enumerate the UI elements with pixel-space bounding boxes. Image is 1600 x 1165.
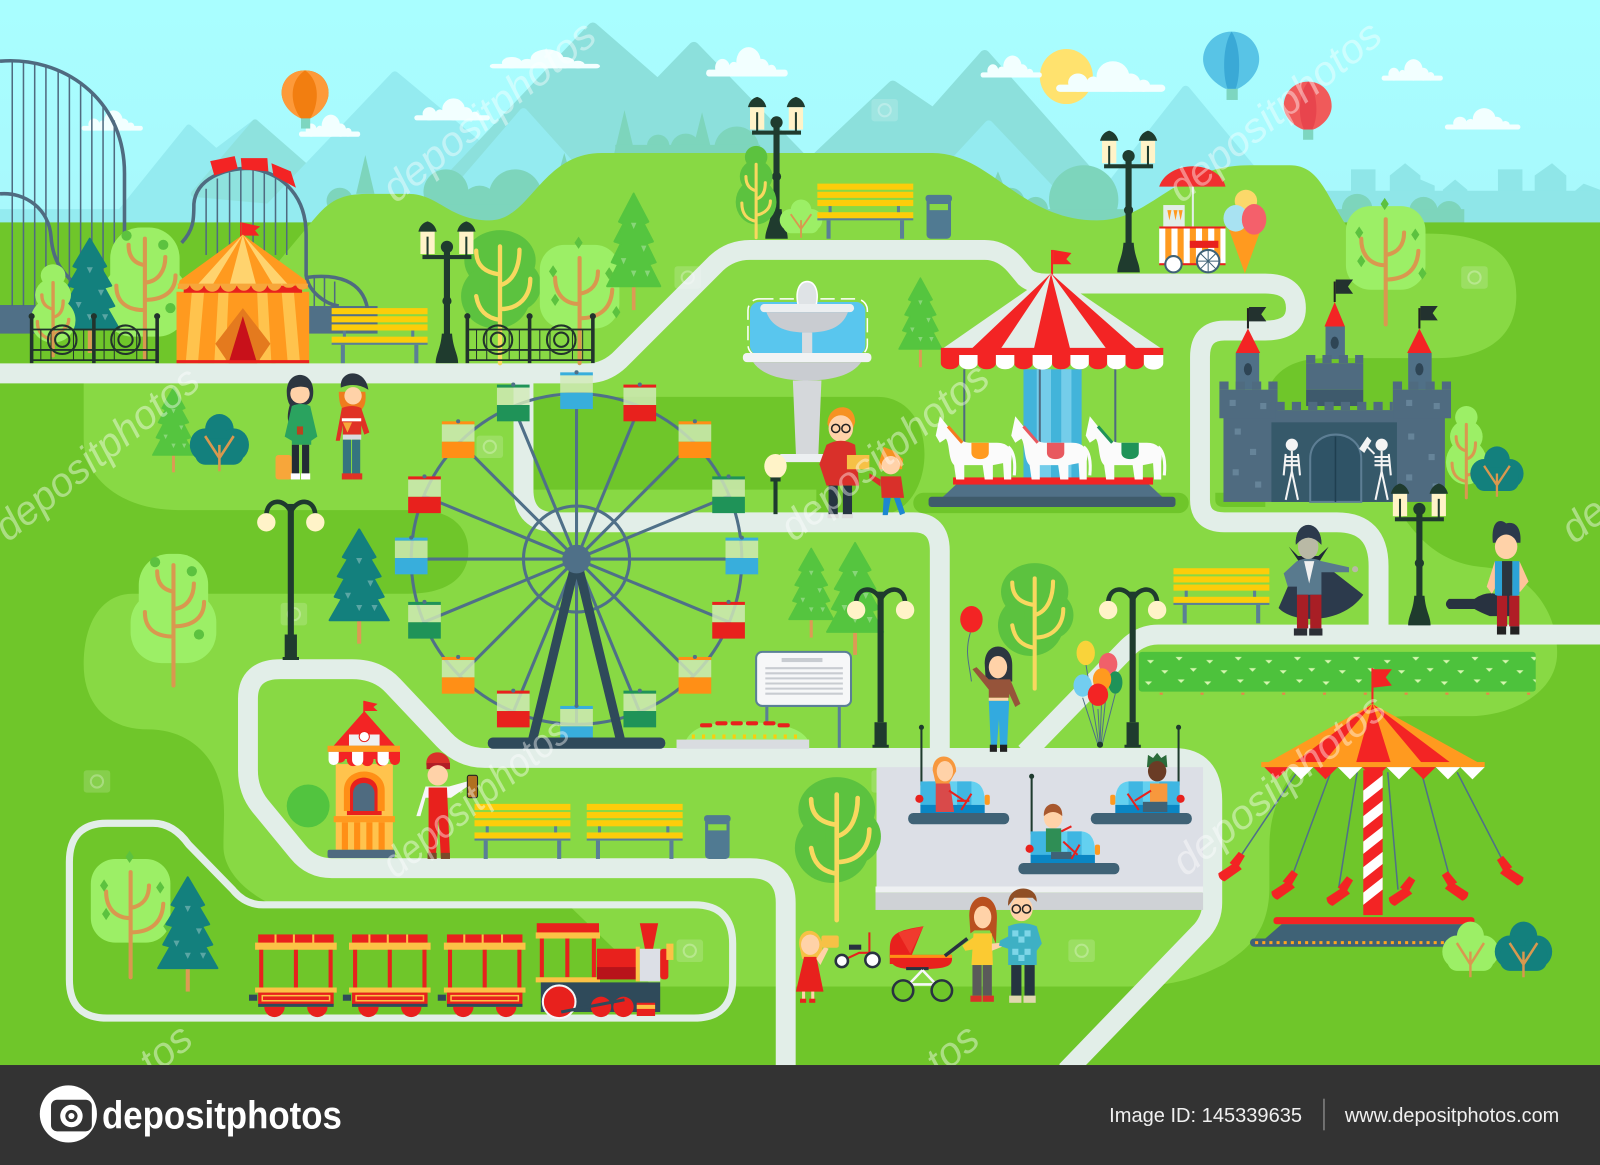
watermarks: depositphotos [771,353,998,550]
tree: light by lamp [540,237,620,363]
bench: lower right [587,804,683,859]
hedge [1139,652,1536,695]
father with glasses [999,889,1042,1003]
ferris wheel [395,370,758,749]
hot air balloon: red [1284,82,1332,140]
dark ground [0,222,1600,1069]
tree: train loop [91,851,171,977]
lamp post: centre [847,590,914,748]
tree: dark green by lamp [461,230,541,363]
castle [1219,280,1451,502]
road: main lower loop [248,669,1212,1071]
tree: right hill [1346,198,1427,324]
light ground area [84,153,1557,986]
flower bed [677,722,809,749]
hot air balloon: orange [282,70,329,129]
balloon bunch [1073,641,1122,748]
watermarks: depositphotos [373,11,605,211]
tree: by castle [1446,406,1487,498]
conifer: teal left field [330,529,389,644]
fence: left [29,313,160,363]
cabins [395,370,758,743]
musician with guitar case [1446,521,1529,635]
swing carousel [1218,668,1523,947]
wheel frame [411,394,742,724]
watermarks: depositphotos [1162,684,1394,884]
train carriage 3 [438,934,526,1017]
lamp post: tent [418,221,476,363]
roller coaster [0,61,378,334]
conifer: teal near coaster [60,239,119,353]
image id: Image ID: 145339635 [1109,1105,1302,1127]
bush: top hill [780,199,822,238]
small lamp [764,454,787,514]
bumper car arena floor [876,767,1203,910]
watermarks: tos [917,1014,988,1084]
tree: narrow lime [31,264,76,356]
stroller [890,926,967,1001]
clouds [82,47,1520,137]
logo icon [40,1085,97,1143]
website: www.depositphotos.com [1344,1105,1559,1127]
fountain [743,282,871,462]
skeleton: right [1359,437,1391,500]
bush: by visitors [190,414,249,471]
conifers: centre pair [789,543,883,655]
bumper car: centre [1018,774,1119,874]
lamp post: balloons [1099,590,1166,748]
information board [756,652,851,748]
road: centre path [523,383,940,760]
dark patches on light ground [534,397,1265,515]
lamp post: castle [1391,484,1448,625]
bush: by castle [1470,446,1524,497]
road network [0,250,1600,1071]
giant ice cream [1223,190,1266,273]
visitor: girl in green [276,375,317,479]
sky [0,0,1600,224]
bench: mid-right [1173,568,1269,623]
vampire [1279,525,1363,636]
conifer: beside carousel [899,278,942,367]
conifer: by visitors [153,388,194,472]
train [249,923,673,1018]
bench: lower left [474,804,570,859]
carousel [929,250,1176,507]
skeleton: left [1284,439,1300,500]
tree: by arena [795,777,881,920]
road: right branch [1026,635,1600,753]
watermarks: depositphotos [1158,11,1390,211]
bench: by tent [332,308,428,363]
fence: right [464,313,596,363]
trash bin: lower [704,815,731,859]
sun [1040,49,1093,104]
road: upper park path [0,250,1379,635]
lamp post: left field [257,502,324,660]
locomotive [536,923,673,1018]
visitor: child with father [869,447,905,515]
bush: light by swing [1442,922,1499,977]
roller coaster cars [210,156,296,188]
watermarks: tos [130,1014,201,1084]
conifer: train loop [158,877,217,992]
distant city skyline [1311,163,1600,222]
hot air balloon: blue [1203,32,1259,100]
visitor: father with map [819,407,869,518]
visitor: girl in red [336,373,369,479]
ice cream cart [1159,166,1226,272]
mountains [0,28,1296,224]
bench: top hill [817,184,913,239]
tree: light near coaster [102,227,188,359]
visitor: girl with red balloon [960,606,1020,752]
bush: round by booth [287,784,330,827]
watermarks: depositphotos [373,708,578,886]
logo wordmark: depositphotos [102,1094,342,1137]
lamp post: top hill [748,97,805,239]
train carriage 1 [249,934,337,1017]
circus tent [177,222,309,363]
tricycle [836,932,880,967]
mother [962,897,1002,1002]
train conductor [416,752,478,859]
bush: teal by swing [1495,922,1552,977]
lamp post: ice cream [1100,131,1157,272]
train track loop [69,823,733,1018]
conifer: top hill [607,194,660,310]
ticket booth [328,701,400,858]
footer bar [0,1065,1600,1165]
distant forest [327,110,1464,235]
girl with ticket [796,931,839,1003]
support frame [533,559,620,740]
bumper car: right [1091,725,1192,824]
bumper car: left [908,725,1009,824]
faint camera watermarks [84,99,1488,962]
trash bin: top hill [926,195,952,239]
tree: left field [131,554,216,686]
tree: top hill narrow [736,146,777,238]
train carriage 2 [343,934,431,1017]
tree: centre [998,563,1073,689]
